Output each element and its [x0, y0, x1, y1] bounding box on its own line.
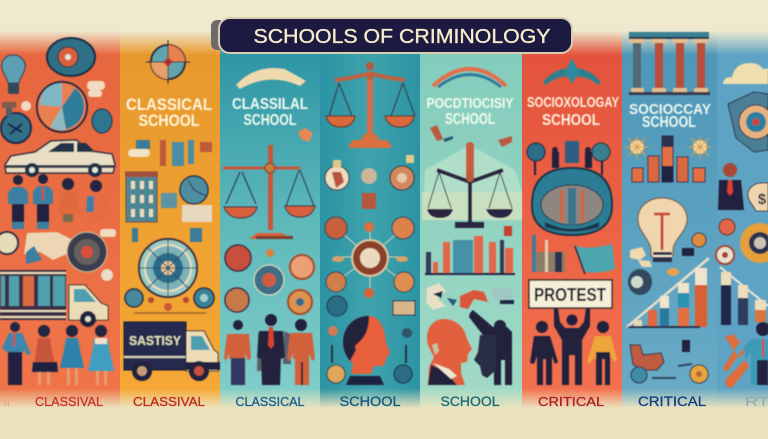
icons: standing figures [224, 314, 315, 385]
panel: second classical school artwork [124, 40, 220, 381]
heading: sociology school: SOCIOCCAY [629, 101, 711, 118]
label: school: SCHOOL [340, 394, 401, 409]
heading: positivist school: POCDTIOCISIY [426, 96, 514, 112]
icon: orange star [298, 128, 313, 142]
panel: cropped right artwork [716, 63, 768, 388]
icon: scroll blobs [21, 81, 105, 111]
title banner: SCHOOLS OF CRIMINOLOGY [254, 25, 551, 48]
icon: big bulb [638, 198, 687, 262]
icon: protest sign: PROTEST [534, 285, 606, 305]
icon: pointing silhouette [469, 310, 512, 385]
icon: globe dome [532, 168, 612, 235]
icon: scale [223, 145, 315, 239]
icon: city skyline [425, 226, 515, 275]
label: school 2: SCHOOL [440, 394, 500, 409]
label: classical: CLASSICAL [236, 394, 304, 409]
chart: bars [632, 136, 705, 182]
icons: top objects row [128, 140, 212, 166]
icon: compass wheel [146, 40, 190, 84]
icon: lower figures [2, 322, 114, 385]
icon: head profile [343, 316, 390, 385]
icon: tangled objects [630, 340, 708, 383]
icons: figures around machine [527, 141, 610, 175]
icons: gear medallions [225, 245, 314, 314]
icon: column temple [629, 32, 710, 95]
heading: positivist school [426, 96, 514, 128]
icon: figure [743, 322, 768, 385]
icons: small side medallions [125, 228, 214, 313]
icon: scattered map [426, 283, 514, 310]
icon: rainbow [433, 69, 506, 87]
icon: protest sign [529, 280, 612, 308]
panel: first classical school artwork [0, 38, 116, 385]
panel: fourth school artwork [325, 62, 415, 385]
icon: bald head [427, 319, 472, 385]
heading: classilal school: CLASSILAL [232, 96, 308, 113]
heading: classical school: CLASSICAL [126, 95, 212, 114]
icon: flag [575, 244, 615, 274]
icons: side instruments [327, 296, 415, 383]
label: critical blue: CRITICAL [638, 394, 707, 409]
icon: large wheel [139, 239, 197, 297]
chart: rising bars [627, 258, 709, 328]
icons: upper trio [325, 155, 414, 209]
icon: crossed arrows [723, 334, 749, 388]
icon: target shard [728, 92, 768, 152]
icon: light bulb [2, 55, 25, 94]
icon: vintage car [5, 140, 115, 177]
icon: pie wheel [37, 82, 87, 132]
icons: mixed mid row [628, 233, 706, 295]
heading: positivist school: SCHOOL [445, 111, 495, 128]
heading: classical school [126, 95, 212, 130]
icon: protesters [530, 308, 617, 385]
icon: sun medallion [740, 223, 768, 263]
icon: dark scale [427, 142, 513, 228]
icon: large scale [326, 62, 415, 148]
icon: valve machine [1, 102, 31, 143]
icon: sastisy truck [124, 322, 220, 381]
icons: tools [430, 125, 512, 147]
label: cropped critical: RT [745, 394, 768, 409]
panel: positivist school artwork [422, 69, 522, 385]
heading: sociology school: SCHOOL [542, 112, 600, 129]
heading: sociology school: SCHOOL [642, 114, 696, 131]
icon: businessman [718, 163, 744, 210]
icon: factory [532, 235, 565, 272]
panel: sociology school artwork [527, 58, 619, 385]
icons: suns [625, 135, 712, 159]
icon: emblem right [92, 109, 112, 133]
panel: sociology and critical blue artwork [625, 32, 712, 383]
heading: sociology school: SOCIOXOLOGAY [527, 95, 619, 111]
chart: falling bars [720, 267, 768, 325]
icons: small circles [716, 219, 735, 264]
label: classival 1: CLASSIVAL [35, 394, 103, 409]
icon: winged emblem [543, 58, 601, 85]
panel: third classical school artwork [223, 68, 315, 385]
icon: small cream truck [69, 285, 108, 327]
icon: arc [236, 68, 306, 89]
heading: classical school: SCHOOL [138, 111, 200, 130]
icon: map fragment and medallion [0, 229, 116, 281]
icon: building [125, 172, 158, 222]
chart: network diagram [325, 217, 414, 298]
heading: sociology school [527, 95, 619, 129]
decoration: sunburst behind scale [424, 145, 522, 192]
icon: dollar bulb [748, 183, 768, 211]
icon: globe and small building [161, 176, 212, 222]
label: critical: CRITICAL [538, 394, 604, 409]
icon: dollar bulb: $ [758, 191, 767, 208]
heading: sociology school [629, 101, 711, 131]
icon: four upper figures [8, 174, 111, 229]
heading: classilal school [232, 96, 308, 129]
icon: row of books [0, 270, 66, 320]
label: classival 2: CLASSIVAL [133, 394, 205, 409]
icon: ornate head emblem [47, 38, 95, 76]
icon: cloud [723, 63, 768, 84]
title banner [211, 18, 572, 53]
icon: sastisy truck: SASTISY [129, 334, 182, 348]
heading: classilal school: SCHOOL [244, 112, 297, 129]
